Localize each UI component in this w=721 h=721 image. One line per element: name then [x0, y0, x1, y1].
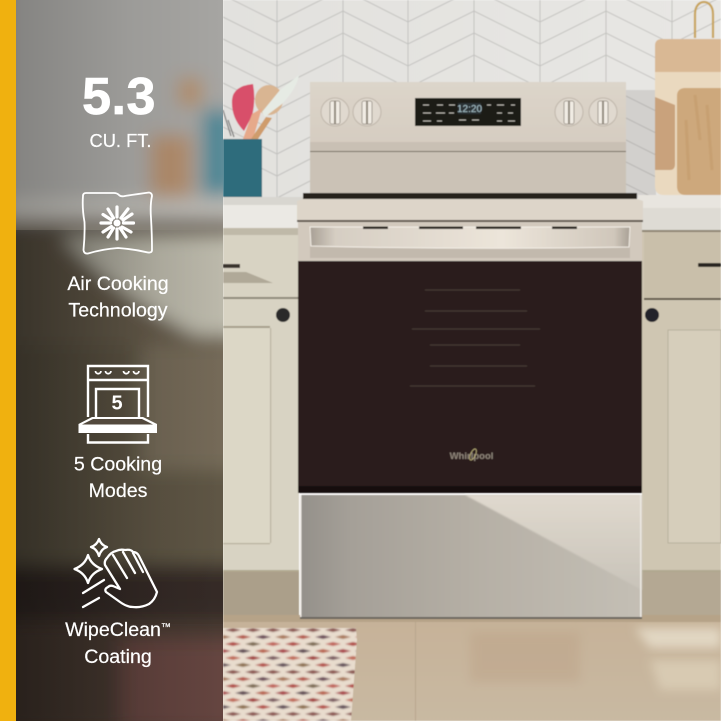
floor — [223, 615, 721, 721]
range: storage drawer — [300, 495, 642, 619]
cabinets — [223, 228, 721, 616]
range — [297, 82, 643, 619]
icon: oven with 5 modes: 5 — [111, 392, 123, 414]
label: air cooking technology: Air Cooking — [67, 273, 169, 295]
range: digital display: 12:20 — [457, 104, 482, 115]
range: backguard control panel — [310, 82, 626, 194]
range: cooktop — [297, 193, 643, 222]
icon: oven with 5 modes — [78, 366, 157, 442]
label: wipeclean coating — [65, 619, 171, 668]
cutting boards — [655, 2, 721, 195]
wall: chevron tile backsplash — [223, 0, 721, 200]
icon: wipeclean hand and sparkles — [74, 539, 157, 607]
icon: air cooking fan — [83, 192, 152, 254]
label: 5 cooking modes — [74, 454, 162, 502]
kitchen scene photo — [223, 0, 721, 721]
label: wipeclean coating: ™ — [161, 622, 171, 633]
label: air cooking technology — [67, 273, 169, 322]
label: air cooking technology: Technology — [68, 300, 168, 322]
range: knobs — [321, 98, 617, 126]
range: door top and handle — [298, 222, 642, 261]
stat: 5.3 cu. ft. — [82, 68, 156, 151]
utensil crock — [223, 75, 299, 197]
stat: 5.3 cu. ft.: CU. FT. — [90, 130, 151, 151]
range: brand logo: Whirlpool — [450, 451, 493, 462]
stat: 5.3 cu. ft.: 5.3 — [82, 68, 156, 126]
rug — [223, 626, 358, 721]
label: 5 cooking modes: Modes — [89, 480, 148, 502]
range: oven door glass — [298, 261, 642, 493]
range: digital display — [415, 98, 521, 126]
left overlay panel background — [16, 0, 223, 721]
label: 5 cooking modes: 5 Cooking — [74, 454, 162, 476]
label: wipeclean coating: Coating — [84, 646, 152, 668]
label: wipeclean coating: WipeClean — [65, 619, 161, 641]
countertop — [223, 195, 721, 230]
yellow accent bar — [0, 0, 16, 721]
